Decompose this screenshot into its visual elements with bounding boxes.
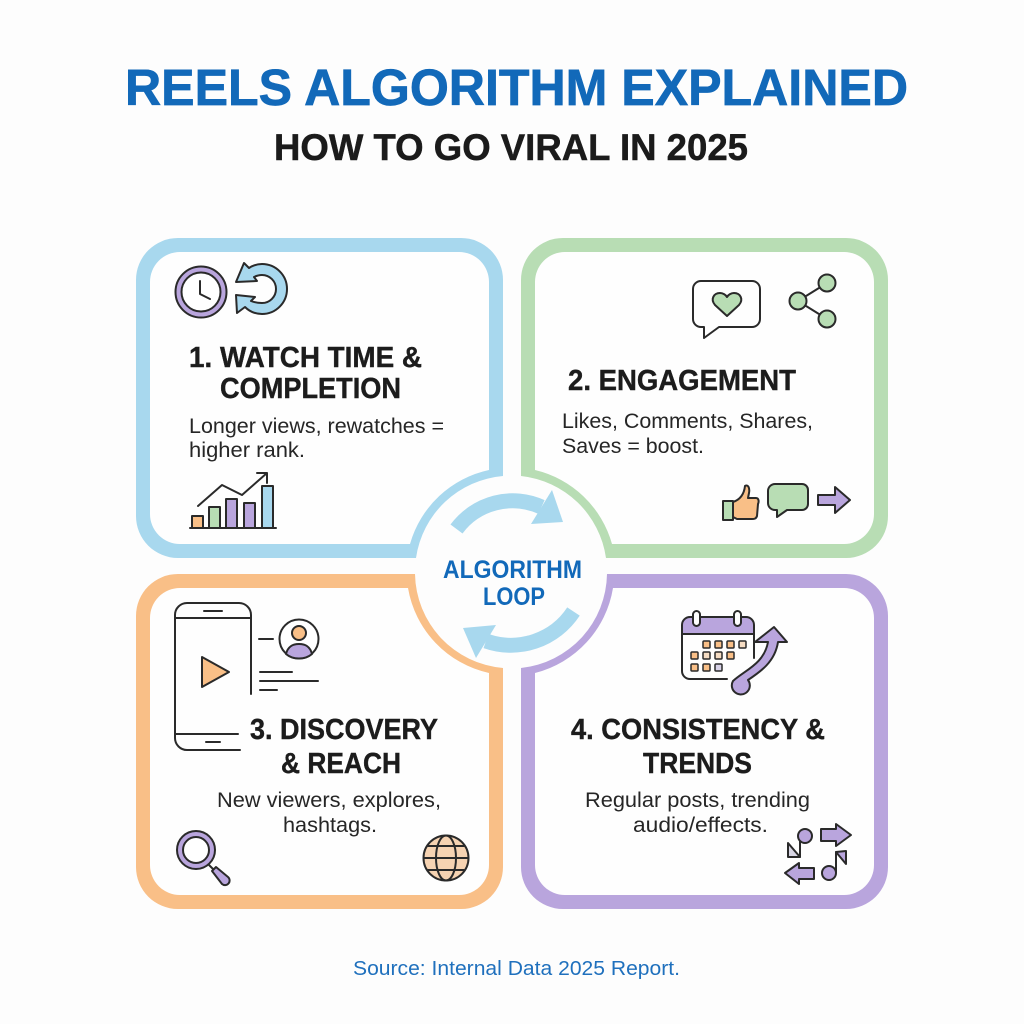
heading: 2. ENGAGEMENT	[568, 365, 796, 397]
center label: LOOP	[483, 583, 545, 611]
icon: purple arrow	[818, 487, 850, 513]
body text	[189, 415, 444, 462]
icon: calendar	[682, 611, 754, 679]
heading: TRENDS	[643, 748, 752, 780]
heading	[571, 714, 825, 780]
heading	[250, 714, 438, 780]
body text: Likes, Comments, Shares,	[562, 410, 813, 433]
body text: higher rank.	[189, 439, 305, 462]
body text	[562, 410, 813, 458]
heading: COMPLETION	[220, 373, 401, 405]
icon: phone with play button	[175, 603, 251, 750]
icon: magnifying glass	[177, 831, 230, 885]
panel: discovery and reach	[136, 574, 503, 909]
center label: ALGORITHM	[443, 556, 582, 584]
body text: Saves = boost.	[562, 435, 704, 458]
arrow: top loop arrow	[456, 490, 563, 529]
icon: green speech bubble	[768, 484, 808, 517]
icon: replay arrows	[236, 263, 287, 314]
heading: 3. DISCOVERY	[250, 714, 438, 746]
icon: speech bubble with heart	[693, 281, 760, 338]
icon: rising curved arrow	[732, 627, 787, 694]
center label	[443, 556, 582, 611]
heading	[189, 342, 422, 405]
icon: thumbs up	[723, 485, 759, 520]
body text: hashtags.	[283, 814, 377, 837]
arrow: bottom loop arrow	[463, 612, 574, 658]
center loop	[443, 490, 582, 658]
body text: Longer views, rewatches =	[189, 415, 444, 438]
icon: music notes and swap arrows	[785, 824, 851, 884]
icon: clock	[176, 266, 226, 318]
body text: Regular posts, trending	[585, 789, 810, 812]
body text: New viewers, explores,	[217, 789, 441, 812]
subtitle: HOW TO GO VIRAL IN 2025	[274, 127, 748, 168]
heading: & REACH	[281, 748, 401, 780]
body text	[217, 789, 441, 837]
icon: bar chart with trend arrow	[190, 473, 276, 528]
panel: engagement	[521, 238, 888, 558]
icon: globe	[424, 836, 468, 880]
body text	[585, 789, 810, 837]
panel: watch time and completion	[136, 238, 503, 558]
body text: audio/effects.	[633, 814, 768, 837]
panel: consistency and trends	[521, 574, 888, 909]
icon: viewer avatar with lines	[259, 620, 318, 690]
heading: 4. CONSISTENCY &	[571, 714, 825, 746]
title: REELS ALGORITHM EXPLAINED	[125, 59, 908, 116]
source note: Source: Internal Data 2025 Report.	[353, 958, 680, 980]
icon: share nodes	[790, 274, 836, 328]
heading: 1. WATCH TIME &	[189, 342, 422, 374]
